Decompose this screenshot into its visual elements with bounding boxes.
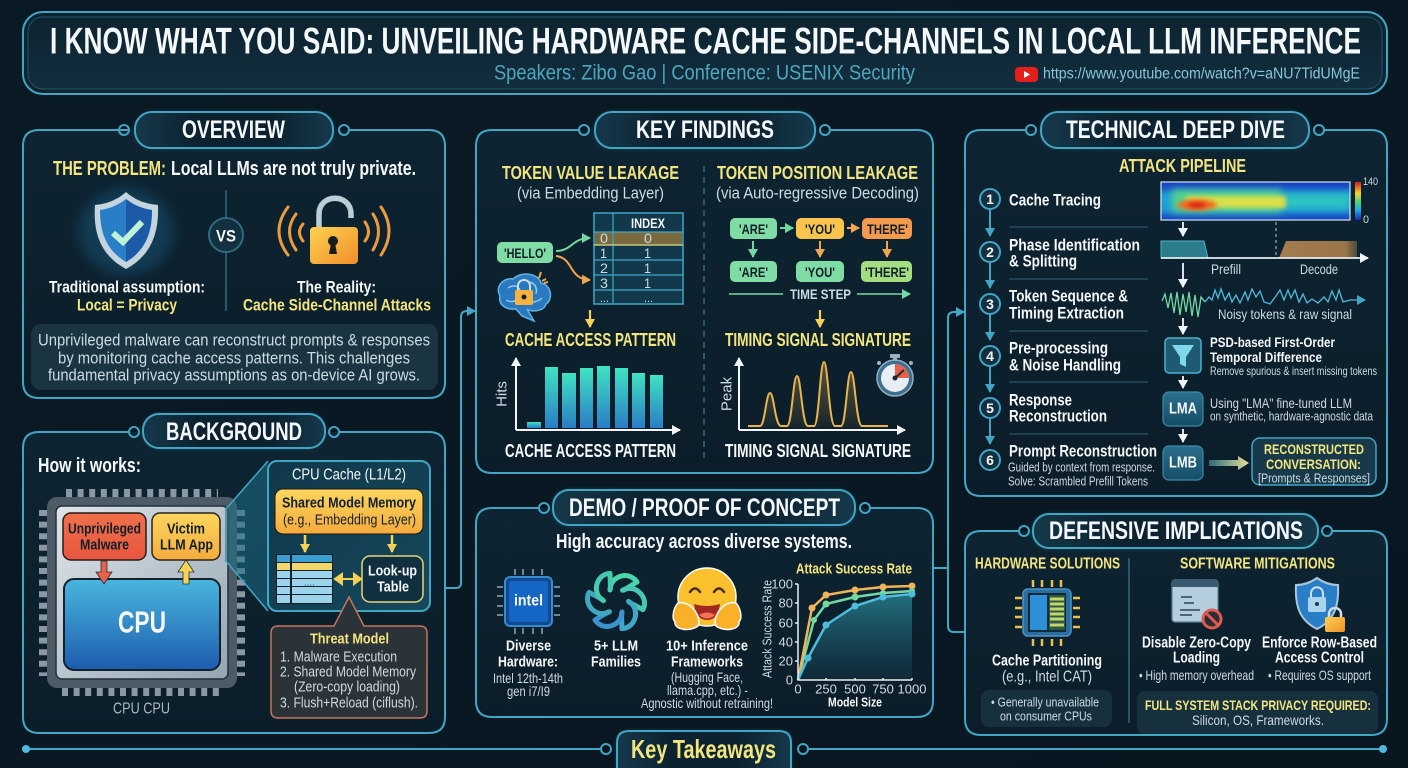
line chart: timing peaks: Peak	[718, 376, 736, 411]
heading: overview: OVERVIEW	[182, 116, 285, 144]
subheading: high accuracy: High accuracy across diverse systems.	[556, 531, 852, 553]
icon: intel chip: intel	[514, 592, 543, 610]
llm families label	[591, 638, 641, 670]
icon: partitioned chip	[1015, 580, 1080, 646]
panel: technical deep dive	[965, 112, 1387, 496]
token sequence diagram: TIME STEP	[790, 286, 851, 302]
embedding index table: 1	[644, 275, 651, 291]
bar chart: hits	[494, 358, 680, 430]
cache access pattern caption: CACHE ACCESS PATTERN	[505, 441, 676, 461]
line chart: attack success rate: 80	[779, 596, 793, 610]
threat model callout: (Zero-copy loading)	[294, 678, 400, 696]
hello token	[497, 242, 553, 263]
embedding index table: 0	[644, 230, 652, 246]
reconstructed conversation box: CONVERSATION:	[1266, 456, 1361, 472]
heatmap colour scale: 0	[1363, 214, 1369, 226]
shared model memory box: Shared Model Memory	[282, 494, 417, 512]
token position leakage heading	[716, 163, 919, 202]
victim llm app box: Victim	[167, 520, 205, 538]
line chart: attack success rate: 0	[794, 682, 802, 696]
arrows hello to table	[556, 238, 590, 280]
raw signal wave	[1162, 289, 1365, 317]
icon: youtube	[1015, 67, 1038, 82]
token value leakage heading	[502, 163, 679, 202]
icon: stopwatch	[877, 354, 913, 396]
shared model memory box	[275, 489, 423, 534]
step 2 label: Phase Identification	[1009, 236, 1140, 254]
step numbers with arrows: 1	[986, 191, 994, 207]
attack pipeline heading: ATTACK PIPELINE	[1119, 156, 1246, 176]
step 1 label: Cache Tracing	[1009, 190, 1101, 210]
bar chart: hits: Hits	[494, 381, 510, 407]
panel: defensive implications	[965, 514, 1387, 735]
cpu cache zoom callout: CPU Cache (L1/L2)	[292, 466, 406, 484]
arrow down	[819, 310, 821, 327]
heading: demo: DEMO / PROOF OF CONCEPT	[569, 494, 840, 522]
line chart: attack success rate: 500	[844, 682, 866, 696]
lmb block: LMB	[1169, 454, 1197, 472]
line chart: attack success rate	[760, 560, 926, 710]
heatmap colour scale	[1355, 176, 1378, 226]
heading: technical deep dive: TECHNICAL DEEP DIVE	[1066, 116, 1285, 144]
lma description	[1210, 395, 1374, 424]
summary box: by monitoring cache access patterns. This challenges	[58, 348, 410, 368]
cache partitioning label	[992, 652, 1102, 686]
lma block: LMA	[1169, 400, 1197, 418]
diverse hardware label	[493, 638, 563, 699]
step 2 label	[1009, 236, 1140, 270]
enforce row-based label: Access Control	[1275, 650, 1364, 666]
double arrow	[335, 574, 361, 584]
how it works label: How it works:	[38, 455, 141, 477]
embedding index table: 2	[600, 260, 608, 276]
token sequence diagram: 'ARE'	[739, 264, 768, 280]
signal caption: Noisy tokens & raw signal	[1218, 306, 1352, 322]
step 3 label	[1009, 286, 1128, 322]
embedding index table: ...	[644, 291, 653, 305]
unprivileged malware box: Malware	[80, 536, 129, 554]
speakers and conference: Speakers: Zibo Gao | Conference: USENIX Security	[494, 62, 915, 84]
step numbers with arrows: 3	[986, 296, 994, 312]
token sequence diagram	[729, 218, 912, 302]
step 6 label: Solve: Scrambled Prefill Tokens	[1008, 474, 1148, 488]
step 4 label: & Noise Handling	[1009, 356, 1121, 374]
arrow down	[1182, 318, 1184, 334]
cache access pattern heading: CACHE ACCESS PATTERN	[505, 330, 676, 350]
line chart: attack success rate: Attack Success Rate	[796, 560, 912, 578]
arrow down	[589, 310, 591, 327]
hardware solutions heading: HARDWARE SOLUTIONS	[975, 556, 1120, 572]
step numbers with arrows: 2	[986, 244, 994, 260]
cpu chip diagram	[43, 493, 241, 692]
embedding index table: 3	[600, 275, 608, 291]
line chart: attack success rate: 0	[786, 672, 793, 688]
inference frameworks label: Frameworks	[671, 654, 743, 670]
line chart: attack success rate: 60	[779, 616, 793, 630]
embedding index table: INDEX	[631, 215, 666, 231]
inference frameworks label: llama.cpp, etc.) -	[667, 682, 748, 698]
inference frameworks label: Agnostic without retraining!	[641, 695, 773, 711]
summary box	[31, 324, 438, 390]
arrow: cpu to victim	[178, 560, 194, 584]
line chart: attack success rate: 750	[872, 682, 894, 696]
heading: key takeaways: Key Takeaways	[631, 734, 776, 764]
icon: open lock with signal waves	[279, 198, 389, 264]
memory table: ....	[304, 578, 315, 588]
hardware caveat box: on consumer CPUs	[1000, 708, 1092, 724]
line chart: timing peaks	[718, 358, 905, 430]
step dividers	[1009, 227, 1148, 434]
llm families label: Families	[591, 654, 641, 670]
phase split chart: Decode	[1300, 261, 1338, 277]
icon: llm families knot	[583, 570, 649, 632]
step 4 label: Pre-processing	[1009, 338, 1108, 358]
caption: traditional assumption: Traditional assumption:	[49, 278, 205, 296]
inference frameworks label: (Hugging Face,	[671, 669, 743, 685]
token sequence diagram: 'YOU'	[805, 221, 835, 237]
step numbers with arrows	[980, 189, 1000, 470]
step 6 label: Guided by context from response.	[1008, 460, 1155, 474]
arrow: malware to cpu	[96, 561, 112, 584]
software mitigations heading: SOFTWARE MITIGATIONS	[1180, 556, 1335, 572]
full stack privacy box: Silicon, OS, Frameworks.	[1192, 712, 1324, 728]
arrows down to table	[305, 535, 392, 552]
disable zero-copy label: • High memory overhead	[1139, 667, 1254, 683]
step numbers with arrows: 6	[986, 452, 994, 468]
token position leakage heading: TOKEN POSITION LEAKAGE	[717, 163, 918, 183]
step 4 label	[1009, 338, 1121, 374]
embedding index table: 1	[644, 260, 651, 276]
icon: window with no sign	[1172, 580, 1221, 628]
line chart: attack success rate: 20	[779, 654, 793, 668]
step 3 label: Timing Extraction	[1009, 304, 1124, 322]
line chart: attack success rate: 250	[815, 682, 837, 696]
step 5 label: Response	[1009, 390, 1072, 410]
divider vs: VS	[216, 226, 236, 246]
connectors between panels	[445, 311, 965, 632]
hardware caveat box	[981, 690, 1112, 727]
threat model callout	[271, 597, 427, 718]
caption: traditional assumption	[49, 278, 205, 314]
disable zero-copy label	[1139, 634, 1254, 683]
lmb block	[1163, 446, 1203, 480]
heatmap: cache trace	[1150, 182, 1365, 220]
psd step description	[1210, 334, 1377, 378]
disable zero-copy label: Disable Zero-Copy	[1142, 634, 1251, 652]
timing signal signature heading: TIMING SIGNAL SIGNATURE	[725, 330, 911, 350]
caption: the reality: The Reality:	[297, 278, 376, 296]
cache partitioning label: (e.g., Intel CAT)	[1002, 668, 1092, 686]
shared model memory box: (e.g., Embedding Layer)	[283, 512, 416, 528]
arrow down	[1182, 222, 1184, 236]
victim llm app box: LLM App	[160, 536, 213, 554]
look-up table box	[362, 556, 423, 602]
lma description: Using "LMA" fine-tuned LLM	[1210, 395, 1352, 411]
divider vs	[209, 190, 243, 311]
step numbers with arrows: 5	[986, 400, 994, 416]
panel: overview	[23, 112, 445, 398]
disable zero-copy label: Loading	[1173, 650, 1220, 666]
heatmap colour scale: 140	[1363, 176, 1378, 188]
inference frameworks label: 10+ Inference	[666, 638, 748, 654]
title banner	[23, 12, 1387, 94]
icon: brain with lock	[498, 272, 550, 321]
threat model callout: Threat Model	[310, 630, 389, 648]
token sequence diagram: 'YOU'	[805, 264, 835, 280]
cpu core block	[64, 579, 220, 670]
threat model callout: 3. Flush+Reload (ciflush).	[280, 694, 418, 712]
key takeaways footer	[22, 731, 1387, 768]
icon: shield with check	[78, 188, 174, 276]
memory table	[276, 554, 333, 604]
line chart: attack success rate: 100	[771, 576, 793, 592]
diverse hardware label: Hardware:	[498, 654, 558, 670]
step 6 label	[1008, 442, 1157, 488]
cpu caption: CPU CPU	[113, 700, 170, 718]
arrow down	[1182, 263, 1184, 287]
arrow down	[1182, 429, 1184, 442]
victim llm app box	[152, 513, 220, 560]
summary box: Unprivileged malware can reconstruct prompts & responses	[38, 330, 430, 350]
token value leakage heading: (via Embedding Layer)	[517, 184, 664, 202]
caption: the reality	[243, 278, 431, 314]
enforce row-based label: • Requires OS support	[1268, 667, 1371, 683]
embedding index table	[594, 213, 683, 305]
diverse hardware label: Diverse	[506, 638, 551, 654]
heading: key findings: KEY FINDINGS	[636, 116, 774, 144]
inference frameworks label	[641, 638, 773, 711]
hardware caveat box: • Generally unavailable	[991, 694, 1099, 710]
the problem statement: Local LLMs are not truly private.	[171, 158, 416, 180]
psd step description: Temporal Difference	[1210, 349, 1322, 365]
icon: filter funnel	[1165, 338, 1201, 373]
embedding index table: ...	[600, 291, 609, 305]
panel: background	[23, 414, 445, 733]
step 5 label	[1009, 390, 1107, 426]
panel: key findings	[476, 112, 933, 473]
embedding index table: 1	[644, 245, 651, 261]
heading: defensive implications: DEFENSIVE IMPLICATIONS	[1049, 517, 1303, 545]
summary box: fundamental privacy assumptions as on-device AI grows.	[48, 366, 420, 384]
threat model callout: 1. Malware Execution	[280, 648, 397, 666]
panel: demo proof of concept	[476, 490, 933, 717]
heading: background: BACKGROUND	[166, 418, 302, 446]
embedding index table: 1	[600, 245, 607, 261]
llm families label: 5+ LLM	[594, 638, 638, 654]
threat model callout: 2. Shared Model Memory	[280, 664, 416, 680]
cache partitioning label: Cache Partitioning	[992, 652, 1102, 670]
token position leakage heading: (via Auto-regressive Decoding)	[716, 184, 919, 202]
psd step description: PSD-based First-Order	[1210, 334, 1335, 350]
line chart: attack success rate: Attack Success Rate	[760, 580, 774, 678]
arrow to result	[1209, 456, 1249, 470]
the problem statement	[53, 158, 416, 180]
caption: the reality: Cache Side-Channel Attacks	[243, 296, 431, 314]
phase split chart	[1161, 222, 1368, 277]
icon: intel chip	[497, 569, 560, 634]
line chart: attack success rate: Model Size	[828, 694, 882, 710]
phase split chart: Prefill	[1211, 261, 1241, 277]
diverse hardware label: gen i7/I9	[507, 683, 550, 699]
icon: hugging face	[673, 568, 741, 629]
cpu cache zoom callout	[225, 461, 430, 611]
caption: traditional assumption: Local = Privacy	[77, 296, 177, 314]
video link: https://www.youtube.com/watch?v=aNU7TidUMgE	[1043, 66, 1360, 82]
the problem statement: THE PROBLEM:	[53, 158, 166, 180]
step 5 label: Reconstruction	[1009, 406, 1107, 426]
token sequence diagram: THERE'	[867, 221, 908, 237]
full stack privacy box	[1137, 691, 1378, 734]
step numbers with arrows: 4	[986, 348, 994, 364]
look-up table box: Look-up	[368, 562, 417, 580]
token sequence diagram: 'ARE'	[739, 221, 768, 237]
unprivileged malware box: Unprivileged	[68, 520, 141, 538]
enforce row-based label	[1262, 634, 1377, 683]
line chart: attack success rate: 1000	[898, 682, 926, 696]
reconstructed conversation box	[1252, 438, 1376, 486]
reconstructed conversation box: [Prompts & Responses]	[1258, 470, 1370, 486]
step 2 label: & Splitting	[1009, 252, 1077, 270]
cpu core block: CPU	[118, 604, 166, 640]
arrow down	[1182, 376, 1184, 388]
diverse hardware label: Intel 12th-14th	[493, 670, 563, 686]
hello token: 'HELLO'	[504, 245, 546, 261]
lma block	[1163, 392, 1203, 426]
unprivileged malware box	[63, 513, 146, 560]
icon: shield with lock	[1296, 578, 1345, 632]
step 3 label: Token Sequence &	[1009, 286, 1128, 306]
token sequence diagram: 'THERE'	[865, 264, 909, 280]
line chart: attack success rate: 40	[779, 634, 793, 650]
look-up table box: Table	[377, 578, 409, 596]
token value leakage heading: TOKEN VALUE LEAKAGE	[502, 163, 679, 183]
step 6 label: Prompt Reconstruction	[1009, 442, 1157, 460]
reconstructed conversation box: RECONSTRUCTED	[1264, 441, 1364, 457]
embedding index table: 0	[600, 230, 608, 246]
timing signal signature caption: TIMING SIGNAL SIGNATURE	[725, 441, 911, 461]
